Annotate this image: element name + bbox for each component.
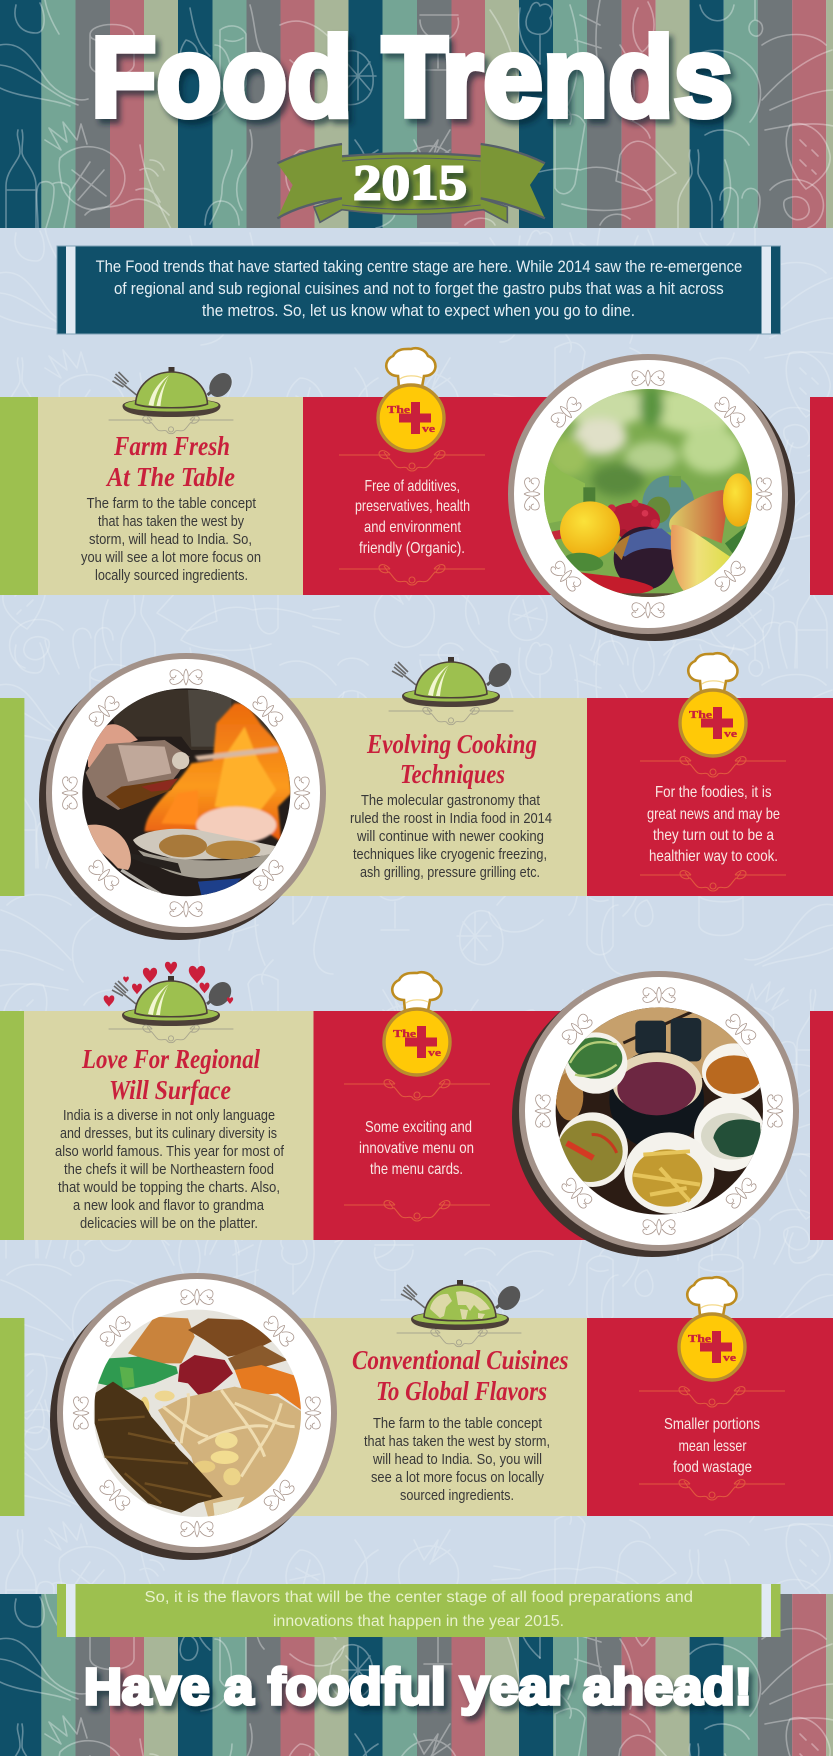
positive text: Smaller portions bbox=[664, 1416, 760, 1433]
intro text bbox=[96, 257, 742, 320]
heading bbox=[352, 1345, 568, 1406]
ornamental divider bbox=[109, 416, 233, 434]
body text: also world famous. This year for most of bbox=[55, 1143, 285, 1160]
plate with flambé photo bbox=[39, 653, 326, 940]
icon: chef hat badge: The bbox=[393, 1028, 416, 1040]
panel: evolving cooking bbox=[0, 653, 833, 940]
ribbon shape bbox=[277, 144, 545, 222]
panel: global flavors bbox=[0, 1273, 833, 1560]
positive text: great news and may be bbox=[647, 806, 780, 823]
ornamental divider bbox=[397, 1329, 521, 1347]
body text: you will see a lot more focus on bbox=[81, 549, 261, 566]
band colours bbox=[0, 698, 833, 896]
body text: The farm to the table concept bbox=[373, 1415, 543, 1432]
heading bbox=[105, 431, 235, 492]
footer stripes with food doodles bbox=[0, 1594, 833, 1756]
positive text: Some exciting and bbox=[365, 1119, 472, 1136]
heading bbox=[81, 1044, 260, 1105]
body text bbox=[55, 1107, 285, 1232]
intro text: of regional and sub regional cuisines and not to forget the gastro pubs that was a hit across bbox=[114, 279, 724, 298]
closing text: innovations that happen in the year 2015. bbox=[273, 1613, 564, 1630]
photo: bibimbap bbox=[94, 1310, 301, 1517]
body text: locally sourced ingredients. bbox=[95, 567, 248, 584]
ornamental divider bbox=[639, 1480, 785, 1500]
title: Food Trends bbox=[91, 14, 733, 140]
body text: delicacies will be on the platter. bbox=[80, 1215, 258, 1232]
heading bbox=[366, 729, 537, 789]
ornamental divider bbox=[389, 707, 513, 725]
ribbon banner with year bbox=[277, 144, 545, 222]
positive text bbox=[355, 478, 470, 557]
icon: chef hat badge: The bbox=[689, 709, 712, 721]
closing text bbox=[144, 1589, 693, 1630]
body text: techniques like cryogenic freezing, bbox=[353, 846, 547, 863]
icon: chef hat badge: ve bbox=[723, 1352, 736, 1364]
positive text: For the foodies, it is bbox=[655, 784, 772, 801]
body text: the chefs it will be Northeastern food bbox=[64, 1161, 274, 1178]
positive text bbox=[359, 1119, 474, 1178]
ornamental divider bbox=[339, 451, 485, 471]
body text: ruled the roost in India food in 2014 bbox=[350, 810, 552, 827]
icon: chef hat badge bbox=[679, 1277, 745, 1380]
positive text bbox=[647, 784, 780, 865]
band colours bbox=[0, 1011, 833, 1240]
icon: chef hat badge: ve bbox=[428, 1047, 441, 1059]
closing banner bbox=[57, 1584, 780, 1637]
positive text: preservatives, health bbox=[355, 498, 470, 515]
band colours bbox=[0, 397, 833, 595]
body text: that would be topping the charts. Also, bbox=[58, 1179, 280, 1196]
icon: chef hat badge bbox=[378, 348, 444, 451]
positive text: they turn out to be a bbox=[653, 827, 774, 844]
positive text: innovative menu on bbox=[359, 1140, 474, 1157]
closing text: So, it is the flavors that will be the center stage of all food preparations and bbox=[144, 1589, 693, 1606]
positive text: mean lesser bbox=[678, 1438, 747, 1455]
body text: will continue with newer cooking bbox=[356, 828, 544, 845]
body text: will head to India. So, you will bbox=[372, 1451, 542, 1468]
year: 2015 bbox=[353, 154, 467, 210]
positive text: and environment bbox=[364, 519, 461, 536]
intro panel bbox=[57, 246, 780, 334]
photo: flambé pan bbox=[82, 688, 290, 896]
plate with bibimbap photo bbox=[50, 1273, 337, 1560]
icon: cloche with world map bbox=[401, 1280, 525, 1330]
ornamental divider bbox=[640, 757, 786, 777]
body text: sourced ingredients. bbox=[400, 1487, 514, 1504]
body text bbox=[364, 1415, 550, 1504]
icon: chef hat badge: The bbox=[387, 404, 410, 416]
body text bbox=[350, 792, 552, 881]
body text: India is a diverse in not only language bbox=[63, 1107, 275, 1124]
photo: fruit and vegetables bbox=[544, 389, 752, 597]
body text bbox=[81, 495, 261, 584]
icon: cloche with cutlery bbox=[392, 657, 516, 707]
heading: Will Surface bbox=[109, 1075, 231, 1105]
body text: that has taken the west by bbox=[98, 513, 244, 530]
icon: chef hat badge bbox=[680, 653, 746, 756]
positive text: Free of additives, bbox=[364, 478, 460, 495]
icon: world map bbox=[430, 1291, 490, 1319]
icon: chef hat badge bbox=[384, 972, 450, 1075]
ornamental divider bbox=[339, 565, 485, 585]
plate with regional dishes photo bbox=[512, 971, 799, 1257]
ornamental divider bbox=[109, 1025, 233, 1043]
positive text: healthier way to cook. bbox=[649, 848, 778, 865]
ornamental divider bbox=[344, 1201, 490, 1221]
body text: and dresses, but its culinary diversity is bbox=[60, 1125, 277, 1142]
band colours bbox=[0, 1318, 833, 1516]
positive text: the menu cards. bbox=[370, 1161, 463, 1178]
heading: Techniques bbox=[400, 759, 505, 789]
icon: hearts bbox=[104, 962, 233, 1007]
positive text bbox=[664, 1416, 760, 1476]
intro text: The Food trends that have started taking centre stage are here. While 2014 saw the re-emergence bbox=[96, 257, 742, 276]
photo: regional bowls bbox=[556, 1007, 763, 1215]
sign-off heading: Have a foodful year ahead! bbox=[84, 1658, 752, 1715]
body text: a new look and flavor to grandma bbox=[73, 1197, 265, 1214]
body text: storm, will head to India. So, bbox=[89, 531, 252, 548]
header stripes with food doodles bbox=[0, 0, 833, 235]
panel: love for regional bbox=[0, 962, 833, 1257]
heading: To Global Flavors bbox=[376, 1376, 547, 1406]
icon: cloche with hearts bbox=[104, 962, 236, 1026]
body text: that has taken the west by storm, bbox=[364, 1433, 550, 1450]
heading: Conventional Cuisines bbox=[352, 1345, 568, 1375]
body text: ash grilling, pressure grilling etc. bbox=[360, 864, 540, 881]
icon: chef hat badge: ve bbox=[724, 728, 737, 740]
body text: The farm to the table concept bbox=[87, 495, 257, 512]
ornamental divider bbox=[640, 871, 786, 891]
heading: At The Table bbox=[105, 462, 235, 492]
ornamental divider bbox=[639, 1387, 785, 1407]
ornamental divider bbox=[344, 1080, 490, 1100]
positive text: friendly (Organic). bbox=[359, 540, 465, 557]
body text: The molecular gastronomy that bbox=[361, 792, 541, 809]
icon: chef hat badge: The bbox=[688, 1333, 711, 1345]
body text: see a lot more focus on locally bbox=[371, 1469, 544, 1486]
heading: Farm Fresh bbox=[113, 431, 230, 461]
intro text: the metros. So, let us know what to expect when you go to dine. bbox=[202, 301, 635, 320]
heading: Evolving Cooking bbox=[366, 729, 537, 759]
heading: Love For Regional bbox=[81, 1044, 260, 1074]
icon: cloche with cutlery bbox=[112, 367, 236, 417]
plate with fruit photo bbox=[508, 354, 795, 641]
icon: chef hat badge: ve bbox=[422, 423, 435, 435]
positive text: food wastage bbox=[673, 1459, 752, 1476]
panel: farm fresh bbox=[0, 348, 833, 641]
